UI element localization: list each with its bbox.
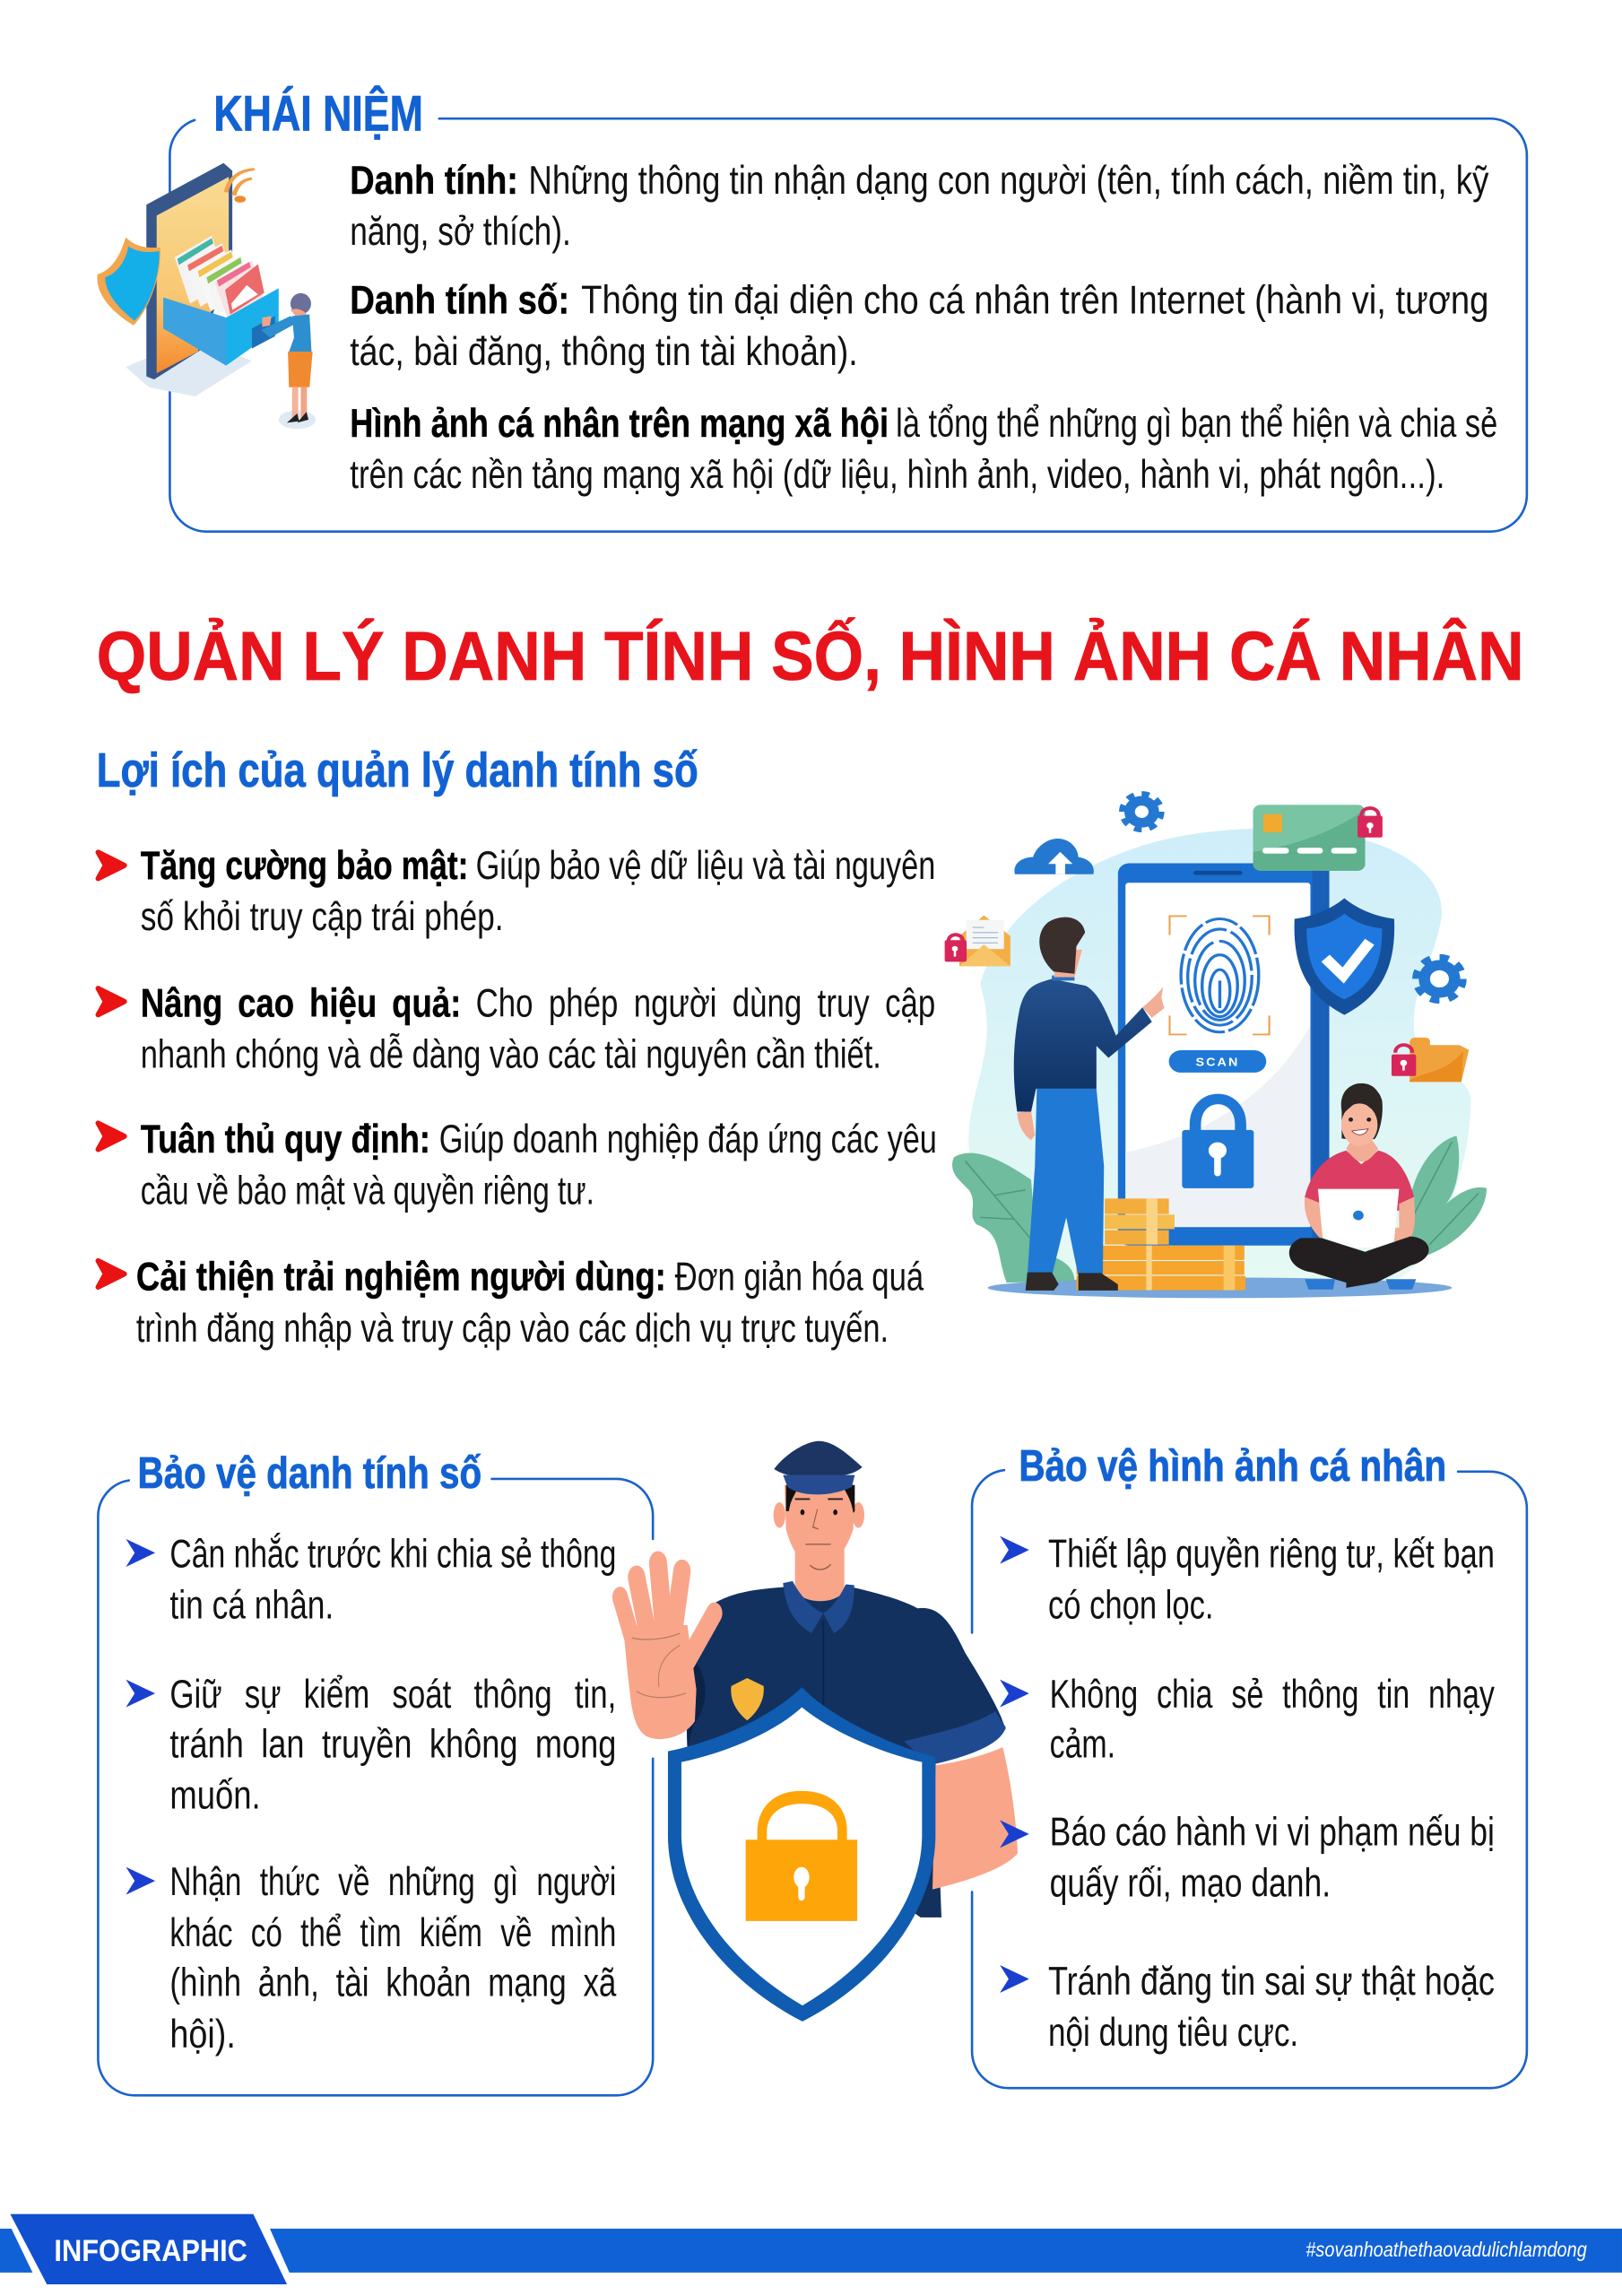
definition: danh tính: Danh tính: [350,159,518,203]
benefit: tăng cường bảo mật: Giúp bảo vệ dữ liệu và tài nguyên [476,844,935,888]
item: tránh đăng tin sai: Tránh đăng tin sai sự thật hoặc [1048,1960,1495,2004]
panel frame [169,118,1527,532]
item: giữ sự kiểm soát: Giữ sự kiểm soát thông tin, [169,1673,616,1717]
benefit: tuân thủ quy định [98,1118,937,1213]
benefit: cải thiện trải nghiệm: Cải thiện trải nghiệm người dùng: [136,1256,666,1300]
benefit: nâng cao hiệu quả: nhanh chóng và dễ dàng vào các tài nguyên cần thiết. [141,1033,881,1077]
definition: danh tính [350,159,1488,254]
panel frame [98,1479,653,2095]
panel: bảo vệ danh tính số [98,1449,653,2095]
footer label: INFOGRAPHIC [54,2234,247,2268]
illustration: fingerprint security phone: SCAN [1195,1056,1239,1069]
item: nhận thức [126,1860,617,2057]
item: không chia sẻ: Không chia sẻ thông tin nhạy [1050,1673,1495,1717]
item: tránh đăng tin sai: nội dung tiêu cực. [1048,2011,1298,2055]
benefit: tuân thủ quy định: Tuân thủ quy định: [141,1118,430,1161]
item: cân nhắc [126,1532,616,1627]
item: cân nhắc: tin cá nhân. [169,1583,334,1627]
panel: khái niệm [97,86,1527,532]
definition: danh tính số: Danh tính số: [350,279,569,323]
item: thiết lập quyền riêng tư: Thiết lập quyền riêng tư, kết bạn [1048,1532,1495,1576]
definition: hình ảnh cá nhân: Hình ảnh cá nhân trên mạng xã hội [350,402,889,446]
item: thiết lập quyền riêng tư: có chọn lọc. [1048,1583,1213,1627]
illustration: fingerprint security phone [945,795,1487,1298]
item: không chia sẻ: cảm. [1050,1723,1115,1767]
item: giữ sự kiểm soát: muốn. [169,1774,261,1818]
item: cân nhắc: Cân nhắc trước khi chia sẻ thông [169,1532,616,1576]
item: nhận thức: Nhận thức về những gì người [169,1860,616,1904]
panel frame [972,1470,1527,2088]
heading: bảo vệ hình ảnh cá nhân: Bảo vệ hình ảnh cá nhân [1019,1442,1446,1491]
benefit: tuân thủ quy định: cầu về bảo mật và quyền riêng tư. [141,1169,594,1213]
item: không chia sẻ [1000,1673,1495,1767]
panel: bảo vệ hình ảnh cá nhân [972,1442,1527,2088]
benefit: cải thiện trải nghiệm: Đơn giản hóa quá [675,1256,924,1300]
item: báo cáo hành vi: quấy rối, mạo danh. [1050,1862,1331,1906]
benefit: nâng cao hiệu quả [98,981,935,1077]
item: báo cáo hành vi [1000,1810,1495,1906]
item: nhận thức: khác có thể tìm kiếm về mình [169,1911,616,1955]
item: báo cáo hành vi: Báo cáo hành vi vi phạm nếu bị [1050,1810,1495,1854]
benefit: tuân thủ quy định: Giúp doanh nghiệp đáp ứng các yêu [439,1118,937,1161]
benefit: tăng cường bảo mật: Tăng cường bảo mật: [141,844,468,888]
illustration: phone and file box [97,163,316,429]
heading: khái niệm: KHÁI NIỆM [213,86,423,142]
footer band [0,2211,1622,2290]
benefit: nâng cao hiệu quả: Cho phép người dùng truy cập [476,981,935,1025]
definition: danh tính số [350,279,1488,374]
benefit: nâng cao hiệu quả: Nâng cao hiệu quả: [141,981,461,1025]
benefit: cải thiện trải nghiệm: trình đăng nhập và truy cập vào các dịch vụ trực tuyến. [136,1307,889,1351]
benefit: tăng cường bảo mật [98,844,935,939]
definition: danh tính: năng, sở thích). [350,210,571,254]
definition: danh tính số: Thông tin đại diện cho cá nhân trên Internet (hành vi, tương [581,279,1488,323]
footer tab [10,2214,287,2284]
illustration: police officer with shield [620,1441,1018,2022]
benefit: tăng cường bảo mật: số khỏi truy cập trái phép. [141,895,504,939]
item: tránh đăng tin sai [1000,1960,1495,2055]
list: bảo vệ hình ảnh cá nhân [1000,1532,1495,2055]
item: giữ sự kiểm soát: tránh lan truyền không mong [169,1723,616,1767]
item: thiết lập quyền riêng tư [1000,1532,1495,1627]
main title: QUẢN LÝ DANH TÍNH SỐ, HÌNH ẢNH CÁ NHÂN [97,618,1524,695]
heading: bảo vệ danh tính số: Bảo vệ danh tính số [137,1449,481,1498]
benefit: cải thiện trải nghiệm [98,1256,924,1351]
item: nhận thức: (hình ảnh, tài khoản mạng xã [169,1961,617,2005]
definition: hình ảnh cá nhân [350,402,1497,497]
heading: lợi ích: Lợi ích của quản lý danh tính số [97,744,698,797]
item: nhận thức: hội). [169,2013,236,2057]
item: giữ sự kiểm soát [126,1673,616,1818]
hashtag: #sovanhoathethaovadulichlamdong [1305,2238,1587,2261]
section: lợi ích [97,744,937,1351]
definition: danh tính số: tác, bài đăng, thông tin tài khoản). [350,330,858,374]
